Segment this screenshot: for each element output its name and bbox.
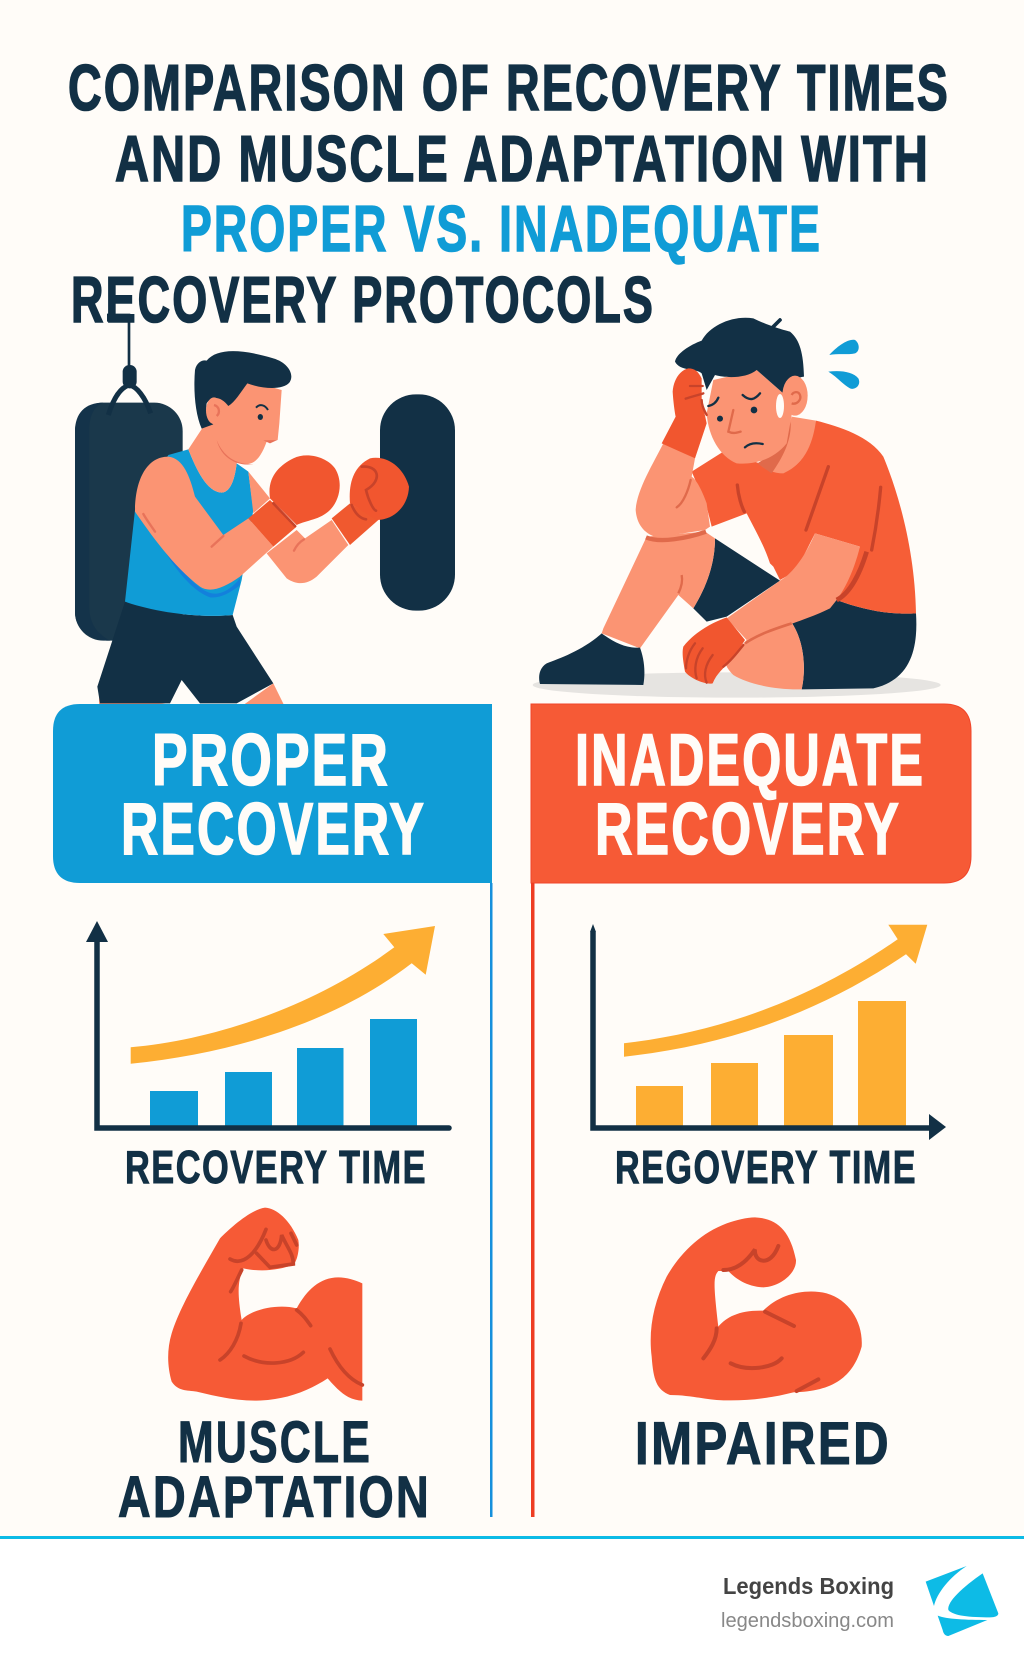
heading: proper recovery: [121, 720, 426, 870]
icon: sweat drops: [828, 340, 859, 389]
label: muscle adaptation: [118, 1410, 431, 1530]
title: [68, 51, 950, 336]
label: muscle adaptation: MUSCLE: [178, 1410, 372, 1475]
footer: [0, 1536, 1024, 1666]
icon: impaired muscle: [651, 1217, 862, 1400]
icon: second punching bag: [380, 394, 455, 611]
chart: inadequate recovery time: [590, 924, 946, 1193]
panel: inadequate recovery: [531, 704, 971, 1517]
figure: tired athlete: [539, 318, 916, 689]
illustration: exhausted athlete sitting: [533, 318, 941, 698]
heading: inadequate recovery: [575, 720, 925, 870]
heading: inadequate recovery: RECOVERY: [595, 789, 901, 870]
floor shadow: [533, 672, 941, 698]
title: RECOVERY PROTOCOLS: [71, 263, 655, 336]
illustration: boxer hitting punching bags: [75, 315, 455, 705]
label: recovery time: RECOVERY TIME: [125, 1141, 427, 1193]
heading: proper recovery: PROPER: [152, 720, 390, 801]
label: muscle adaptation: ADAPTATION: [118, 1465, 431, 1530]
label: regovery time: REGOVERY TIME: [615, 1141, 917, 1193]
brand url: legendsboxing.com: [721, 1609, 894, 1632]
panel: proper recovery: [53, 704, 492, 1517]
icon: strong flexed muscle: [168, 1208, 362, 1401]
chart: proper recovery time: [86, 921, 449, 1193]
icon: logo: [926, 1566, 998, 1636]
brand name: Legends Boxing: [723, 1573, 894, 1599]
heading: proper recovery: RECOVERY: [121, 789, 426, 870]
figure: boxer: [97, 351, 409, 705]
label: impaired: IMPAIRED: [635, 1410, 891, 1477]
icon: hanging heavy bag: [75, 315, 183, 641]
